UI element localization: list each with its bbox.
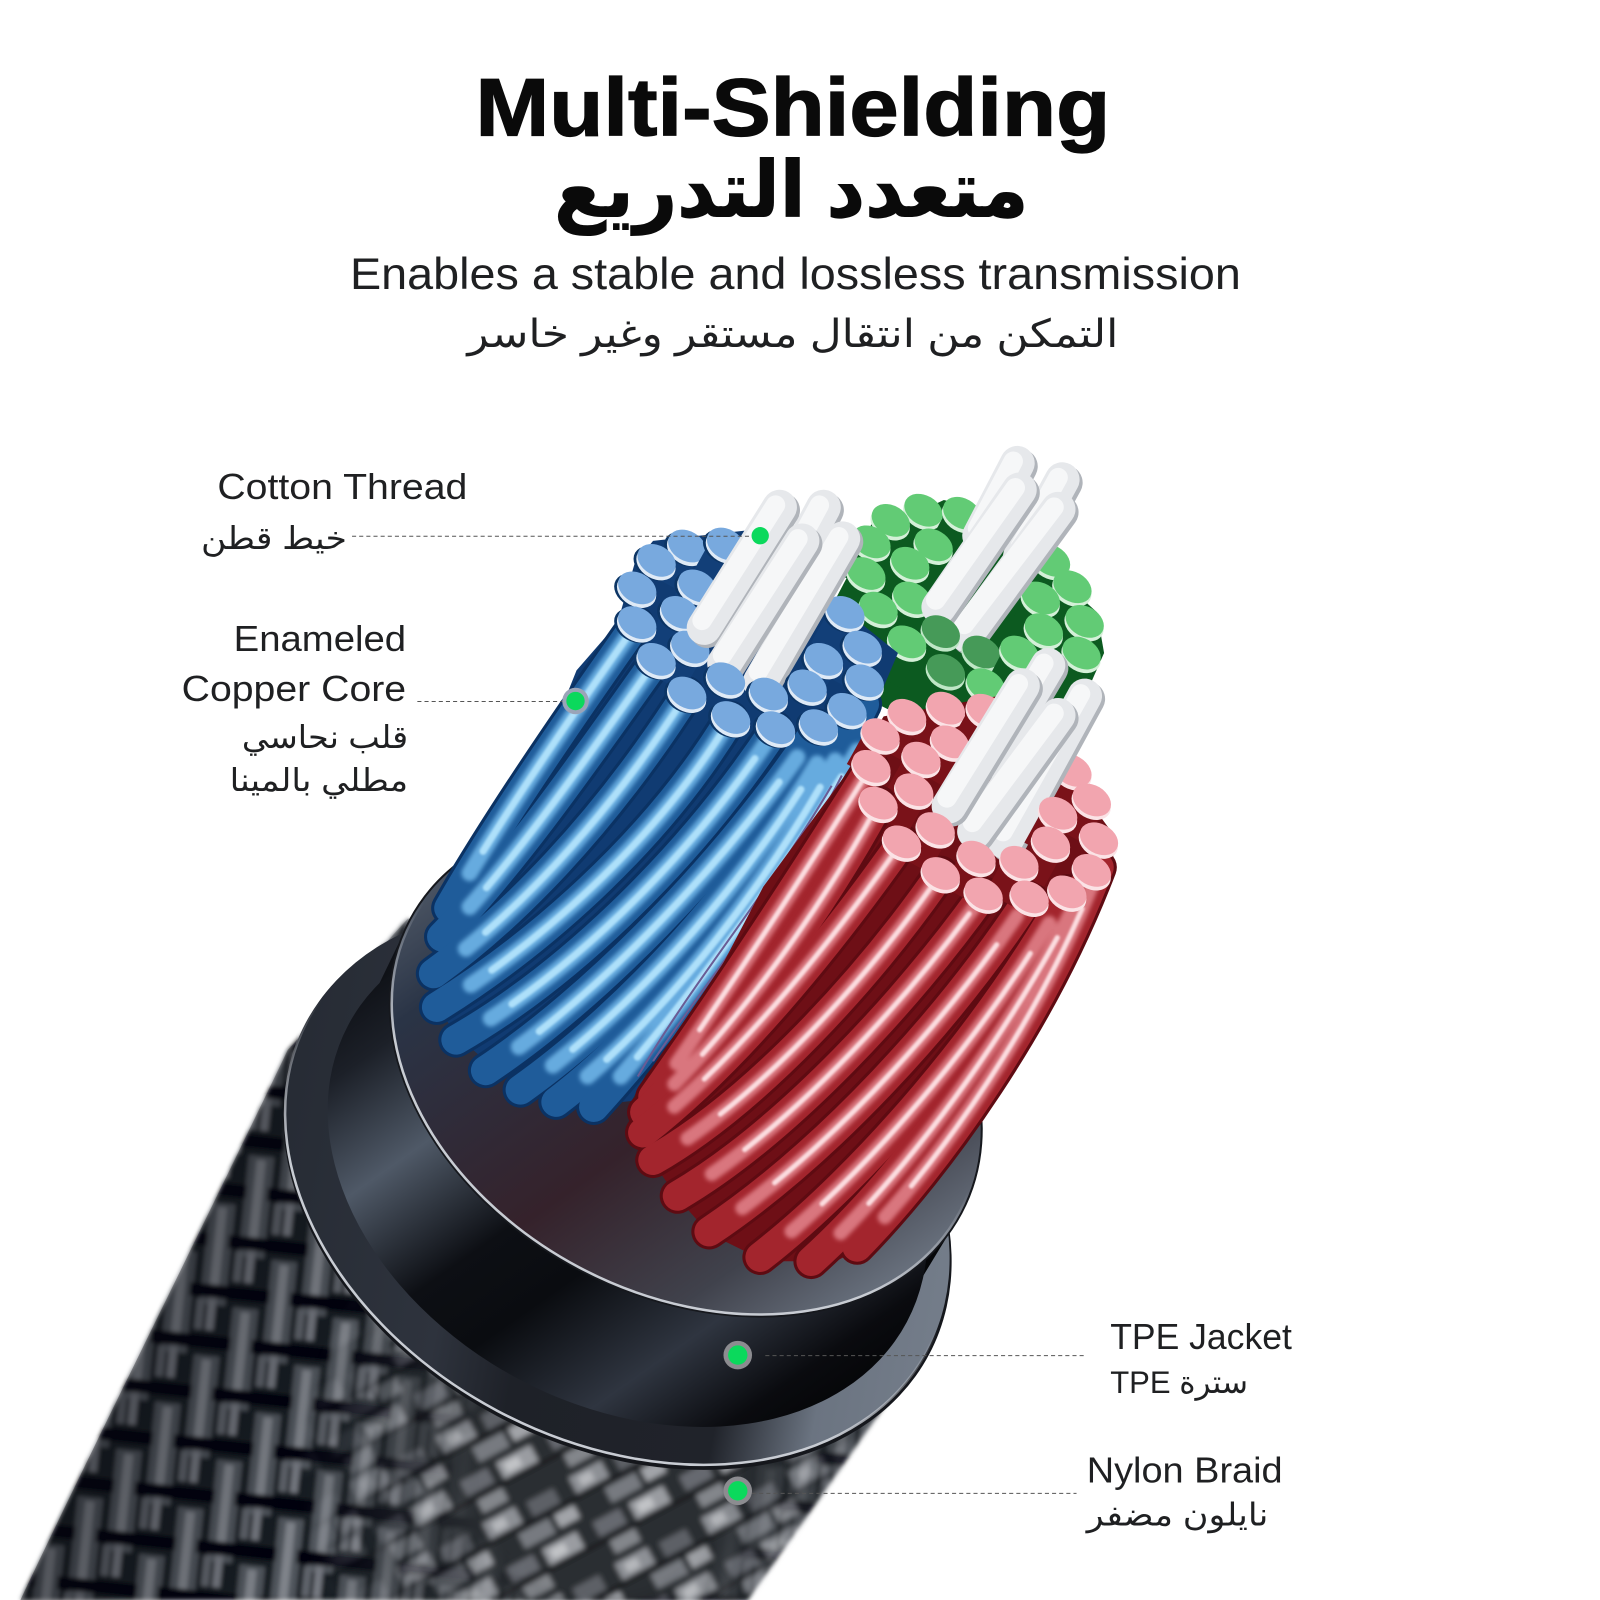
callout: nylon braid bbox=[723, 1451, 1283, 1534]
subtitle bbox=[350, 248, 1241, 357]
callout: nylon braid: نايلون مضفر bbox=[1085, 1497, 1268, 1534]
subtitle: Enables a stable and lossless transmission bbox=[350, 248, 1241, 299]
upper jacket disc bbox=[302, 717, 1069, 1416]
white rods in red bundle bbox=[947, 663, 1088, 845]
green bundle bbox=[839, 461, 1110, 724]
callout: cotton thread: Cotton Thread bbox=[217, 467, 467, 507]
callout: enameled copper core: قلب نحاسي bbox=[242, 719, 408, 756]
callout: cotton thread: خيط قطن bbox=[201, 520, 347, 557]
callout: enameled copper core: Copper Core bbox=[182, 669, 406, 709]
white rods in blue bundle bbox=[702, 505, 846, 685]
subtitle: التمكن من انتقال مستقر وغير خاسر bbox=[465, 313, 1118, 357]
callout: tpe jacket bbox=[723, 1317, 1292, 1401]
callout: cotton thread bbox=[201, 467, 769, 557]
callout: tpe jacket: TPE Jacket bbox=[1110, 1317, 1292, 1357]
cable illustration bbox=[20, 461, 1124, 1600]
TPE jacket cylinder bbox=[239, 820, 1016, 1527]
callout: enameled copper core bbox=[182, 619, 589, 799]
red bundle bbox=[643, 663, 1124, 1261]
white rods in green bundle bbox=[936, 461, 1065, 638]
blue bundle bbox=[429, 505, 898, 1107]
callout: nylon braid: Nylon Braid bbox=[1087, 1451, 1283, 1491]
title: متعدد التدريع bbox=[554, 147, 1029, 235]
callout: tpe jacket: TPE سترة bbox=[1110, 1364, 1248, 1401]
nylon braid body bbox=[20, 918, 918, 1600]
callout: enameled copper core: Enameled bbox=[234, 619, 406, 659]
lower flange bbox=[185, 796, 1050, 1582]
title: Multi-Shielding bbox=[476, 63, 1110, 154]
callout: enameled copper core: مطلي بالمينا bbox=[230, 762, 408, 799]
title bbox=[476, 63, 1110, 235]
